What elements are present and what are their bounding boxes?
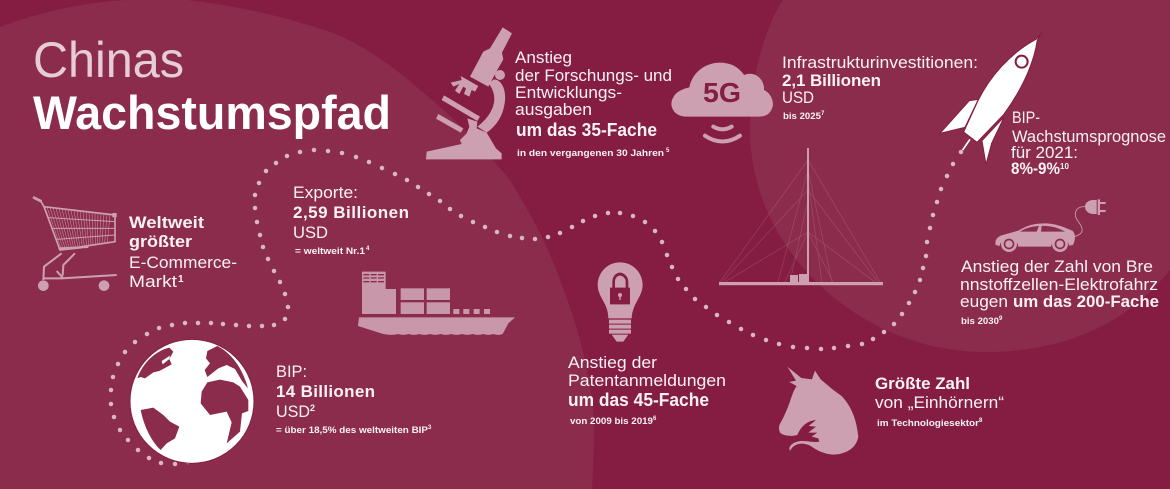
text: research: Anstieg	[515, 48, 572, 67]
dotted growth path	[111, 150, 961, 464]
text: research: der Forschungs- und	[515, 66, 672, 85]
text: GDP forecast: 8%-9%	[1011, 159, 1060, 178]
icon: 5G cloud: 5G	[703, 77, 741, 108]
text: infrastructure: Infrastrukturinvestitionen:	[782, 53, 978, 72]
title	[33, 32, 391, 139]
icon: microscope	[426, 27, 512, 159]
text: exports	[293, 183, 409, 257]
text: GDP: 2	[310, 403, 315, 413]
text: GDP	[276, 362, 432, 436]
icon: unicorn	[779, 367, 858, 455]
text: research: 5	[666, 148, 670, 154]
text: fuel cell vehicles	[960, 257, 1159, 327]
text: patents: Anstieg der	[568, 353, 657, 372]
text: unicorns	[875, 374, 1004, 429]
text: fuel cell vehicles: 9	[999, 316, 1003, 322]
text: infrastructure: 2,1 Billionen	[782, 71, 881, 90]
text: unicorns: 8	[979, 418, 983, 424]
text: research: um das 35-Fache	[516, 120, 657, 140]
text: research: in den vergangenen 30 Jahren	[517, 148, 664, 159]
text: infrastructure: USD	[782, 88, 814, 107]
text: exports: USD	[293, 223, 328, 242]
text: e-commerce: größter	[129, 232, 192, 251]
panel: right background circle	[750, 0, 1170, 352]
text: patents	[568, 353, 726, 427]
text: exports: = weltweit Nr.1	[295, 246, 366, 257]
icon: shopping cart	[34, 198, 117, 291]
text: infrastructure	[782, 53, 978, 122]
text: GDP forecast: für 2021:	[1011, 143, 1078, 162]
text: infrastructure: 7	[821, 111, 825, 117]
text: GDP: 3	[428, 425, 432, 431]
text: GDP: USD	[276, 402, 310, 421]
text: patents: 6	[653, 416, 657, 422]
text: research: Entwicklungs-	[515, 83, 622, 102]
text: GDP: 14 Billionen	[276, 382, 375, 401]
text: unicorns: im Technologiesektor	[877, 418, 979, 429]
text: fuel cell vehicles: nnstoffzellen-Elektrofahrz	[960, 275, 1158, 294]
icon: electric car with plug	[995, 199, 1106, 252]
title: Chinas	[33, 32, 184, 88]
icon: light bulb with lock	[598, 262, 643, 342]
icon: radio mast	[719, 148, 883, 285]
text: e-commerce	[129, 213, 237, 291]
text: e-commerce: 1	[178, 274, 184, 285]
text: GDP: = über 18,5% des weltweiten BIP	[276, 425, 429, 436]
text: research	[515, 48, 672, 159]
text: exports: Exporte:	[293, 183, 358, 202]
text: research: ausgaben	[515, 100, 592, 119]
text: unicorns: Größte Zahl	[875, 374, 970, 393]
text: patents: um das 45-Fache	[568, 390, 709, 410]
text: fuel cell vehicles: bis 2030	[961, 316, 999, 327]
text: exports: 2,59 Billionen	[293, 203, 409, 222]
icon: container ship	[358, 272, 515, 335]
text: exports: 4	[366, 246, 370, 252]
text: GDP forecast: BIP-	[1012, 108, 1040, 127]
text: e-commerce: Markt	[129, 272, 177, 291]
text: GDP forecast	[1011, 108, 1166, 178]
text: patents: von 2009 bis 2019	[570, 416, 653, 427]
text: unicorns: von „Einhörnern“	[875, 393, 1004, 412]
icon: rocket	[940, 32, 1042, 164]
text: fuel cell vehicles: um das 200-Fache	[1013, 292, 1159, 311]
text: GDP: BIP:	[276, 362, 307, 381]
text: fuel cell vehicles: Anstieg der Zahl von Bre	[961, 257, 1153, 276]
text: e-commerce: E-Commerce-	[129, 253, 237, 272]
text: fuel cell vehicles: eugen	[960, 292, 1008, 311]
text: infrastructure: bis 2025	[783, 111, 822, 122]
text: patents: Patentanmeldungen	[568, 371, 726, 390]
text: e-commerce: Weltweit	[129, 213, 204, 232]
panel: left background shape	[0, 0, 594, 489]
icon: 5G cloud	[671, 63, 773, 141]
text: GDP forecast: 10	[1060, 162, 1069, 171]
title: Wachstumspfad	[33, 86, 391, 139]
text: GDP forecast: Wachstumsprognose	[1012, 127, 1166, 146]
icon: globe	[130, 339, 254, 463]
